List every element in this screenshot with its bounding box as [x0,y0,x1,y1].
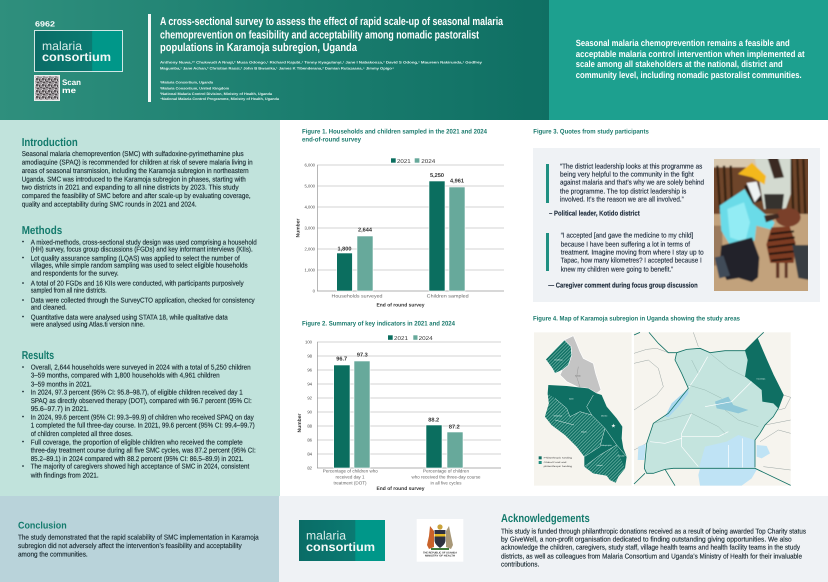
methods list: and cleaned. [31,304,67,312]
affiliations: ⁴National Malaria Control Programme, Ministry of Health, Uganda [160,97,279,101]
results heading: Results [22,350,54,362]
bar chart: figure 1: Households surveyed [332,294,383,299]
bar chart: figure 2: 97.3 [357,352,368,358]
quote 2: because I have been suffering a lot in terms of [561,241,690,249]
bar chart: figure 2: 94 [307,382,313,386]
quote 2: “I accepted [and gave the medicine to my child] [561,232,693,240]
title divider [148,14,151,102]
quote 1: against malaria and that’s why we are solely behind [560,179,704,187]
bar chart: figure 2 [297,335,501,492]
bar chart: figure 1: 5,000 [305,184,316,188]
map: Karamoja districts: Nabilatuk [554,415,562,417]
affiliations [160,80,279,101]
results list: three-day treatment course during all five SMC cycles, was 87.2 percent (95% CI: [31,447,256,455]
results list: 3–59 months in 2021. [31,380,92,388]
logo: malaria consortium: malaria [42,39,82,53]
quote 2 [546,232,704,290]
methods list: A total of 20 FGDs and 16 KIIs were conducted, with participants purposively [31,280,244,288]
icon: star marking study location: ★ [611,423,616,429]
introduction text: Seasonal malaria chemoprevention (SMC) with sulfadoxine-pyrimethamine plus [22,150,244,158]
bar chart: figure 2: 96.7 [336,356,347,362]
scan me label: Scan [62,78,81,87]
methods list: A mixed-methods, cross-sectional study design was used comprising a household [31,238,257,246]
methods list: and respondents for the survey. [31,270,119,278]
poster number: 6962 [35,20,55,28]
title: populations in Karamoja subregion, Uganda [160,42,358,54]
bar chart: figure 1 [296,158,504,309]
bar chart: figure 2: 92 [307,396,313,400]
conclusion text: The study demonstrated that the rapid scalability of SMC implementation in Karamoja [18,534,259,542]
bar chart: figure 1: Children sampled [427,294,469,299]
bar chart: figure 2: 82 [307,466,313,470]
map: Karamoja districts: Kaabong [554,359,562,361]
logo: Uganda Ministry of Health crest: THE REPUBLIC OF UGANDA [423,552,457,554]
introduction text [22,150,253,208]
bar chart: figure 1: 2,644 [358,228,373,234]
map: Karamoja districts: Kotido [575,375,581,377]
photo: health worker giving medicine to a child [714,159,808,291]
scan me label: me [62,86,77,95]
map: Uganda with Karamoja highlighted: Karamoja [757,378,765,380]
map: Uganda with Karamoja highlighted [634,332,791,486]
title [160,16,504,54]
bar chart: figure 2: treatment (DOT) [334,480,367,486]
logo: Uganda Ministry of Health crest: MINISTRY OF HEALTH [425,554,455,558]
bar chart: figure 2: who received the three-day course [412,474,481,480]
results list: SPAQ as directly observed therapy (DOT), compared with 96.7 percent (95% CI: [31,397,252,405]
quote 1: – Political leader, Kotido district [549,210,640,218]
quote 1 [546,163,704,218]
map: Karamoja districts: Amudat [618,455,625,457]
logo: malaria consortium [299,520,385,561]
bar chart: figure 1: 1,800 [338,247,352,253]
panel: participant quotes [533,148,820,302]
legend: 2024 [421,159,435,165]
results list: Overall, 2,644 households were surveyed in 2024 with a total of 5,250 children [31,364,251,372]
legend [388,335,433,342]
methods heading: Methods [22,225,62,237]
quote 1: involved. It’s the reason we are all involved.” [560,196,684,204]
bar chart: figure 1: 6,000 [305,162,316,168]
bar chart: figure 2: 88.2 [428,418,439,424]
map: Karamoja districts: Moroto [601,415,607,417]
conclusion text [18,534,259,559]
methods list [22,238,257,329]
bar chart: figure 2: End of round survey [376,486,425,492]
figure 2 title: Figure 2. Summary of key indicators in 2021 and 2024 [302,321,455,328]
legend: 2021 [397,159,411,165]
acknowledgements text: by GiveWell, a non-profit organisation dedicated to finding outstanding giving opportunities. We also [501,536,792,544]
quote 2: Tapac, how many kilometres? I accepted because I [561,257,702,265]
bar chart: figure 1: 5,250 [430,173,444,179]
legend: 2024 [419,336,433,342]
introduction text: amodiaquine (SPAQ) is recommended for children at risk of severe malaria living in [22,158,253,166]
panel: key message: Seasonal malaria chemoprevention remains a feasible and [576,38,790,48]
figure 1 title: end-of-round survey [302,137,361,144]
map: Karamoja districts: Kween [597,464,603,467]
quote 2: — Caregiver comment during focus group discussion [548,282,698,290]
title: A cross-sectional survey to assess the effect of rapid scale-up of seasonal malaria [160,16,504,28]
map legend [539,456,572,468]
map: Karamoja districts [534,332,632,486]
legend [391,158,435,165]
acknowledgements text: acknowledge the children, caregivers, study staff, village health teams and health facility teams in the study [501,544,800,552]
legend: 2021 [394,336,408,342]
figure 3 title: Figure 3. Quotes from study participants [533,129,649,136]
results list: The majority of caregivers showed high acceptance of SMC in 2024, consistent [31,463,249,471]
figure 1 title [302,128,487,144]
methods list: villages, while simple random sampling was used to select eligible households [31,262,248,270]
results list: In 2024, 99.6 percent (95% CI: 99.3–99.9) of children who received SPAQ on day [31,413,254,421]
methods list: sampled from all nine districts. [31,287,107,295]
results list: with findings from 2021. [30,471,99,479]
introduction text: Uganda. SMC was introduced to the Karamoja subregion in phases, starting with [22,176,246,184]
quote 1: “The district leadership looks at this programme as [560,163,703,171]
bar chart: figure 1: 0 [313,288,316,294]
authors: Magumba,¹ Jane Achan,² Christian Rassi,² John B Bwanika,¹ James K Tibenderana,² Damian Rutazaana,⁴ Jimmy Opigo⁴ [160,66,394,70]
results list [22,364,256,479]
introduction text: two districts in 2021 and expanding to all nine districts by 2023. This study [22,184,239,192]
bar chart: figure 1: 1,000 [305,268,316,272]
bar chart: figure 1: End of round survey [376,303,425,309]
affiliations: ¹Malaria Consortium, Uganda [160,80,213,84]
panel: logos and acknowledgements [279,496,828,582]
introduction text: quality and acceptability during SMC rounds in 2021 and 2024. [22,200,197,208]
bar chart: figure 1: 4,961 [450,179,464,185]
methods list: Quantitative data were analysed using STATA 18, while qualitative data [31,313,228,321]
map: Karamoja districts: Abim [569,398,574,400]
conclusion heading: Conclusion [18,521,67,532]
results list: 1 completed the full three-day course. In 2021, 99.6 percent (95% CI: 99.4–99.7) [31,422,255,430]
figure 4 title: Figure 4. Map of Karamoja subregion in Uganda showing the study areas [533,316,740,323]
logo: malaria consortium [34,30,122,72]
conclusion text: subregion did not adversely affect the intervention’s feasibility and acceptability [18,542,242,550]
QR code [34,75,60,101]
logo: malaria consortium: consortium [42,50,111,64]
panel: key message [549,0,828,120]
bar chart: figure 1: 2,000 [305,246,316,252]
bar chart: figure 2: 90 [307,410,313,414]
introduction heading: Introduction [22,137,78,149]
bar chart: figure 2: Number [297,413,303,432]
results list: 3–59 months, compared with 1,800 households with 4,961 children [31,372,220,380]
bar chart: figure 2: 96 [307,368,313,372]
logo: Uganda Ministry of Health crest [417,519,463,562]
methods list: Data were collected through the SurveyCTO application, checked for consistency [31,297,255,305]
methods list: Lot quality assurance sampling (LQAS) was applied to select the number of [31,254,240,262]
figure 1 title: Figure 1. Households and children sampled in the 2021 and 2024 [302,128,487,135]
bar chart: figure 1: 4,000 [305,204,316,210]
logo: malaria consortium: malaria [306,528,346,542]
map: Karamoja subregion and Uganda [534,332,791,486]
introduction text: areas of seasonal transmission, including the Karamoja subregion in northeastern [22,167,249,175]
quote 2: knew my children were going to benefit.” [561,266,674,274]
bar chart: figure 2: Percentage of children [423,468,469,474]
bar chart: figure 2: 98 [307,354,313,358]
results list: 95.6–97.7) in 2021. [31,405,89,413]
quote 1: being very helpful to the community in the fight [560,171,694,179]
results list: 85.2–89.1) in 2024 compared with 88.2 percent (95% CI: 86.5–89.9) in 2021. [31,455,244,463]
bar chart: figure 2: 88 [307,424,313,428]
acknowledgements text [501,528,806,569]
introduction text: compared the feasibility of SMC before and after scale-up by evaluating coverage, [22,192,251,200]
scan me label [62,78,81,95]
authors: Anthony Nuwa,¹* Chukwudi A Nnaji,² Musa Odongo,¹ Richard Kajubi,¹ Tonny Kyagulanyi,¹ Jane I Nabakooza,³ David S Odong,¹ Maureen Nakirunda,¹ Godfrey [160,60,482,64]
results list: of children completed all three doses. [31,430,133,438]
methods list: were analysed using Atlas.ti version nine. [30,321,145,329]
acknowledgements text: contributions. [501,561,539,569]
panel: conclusion [0,496,279,582]
bar chart: figure 2: 87.2 [449,424,460,430]
methods list: (HH) survey, focus group discussions (FGDs) and key informant interviews (KIIs). [31,246,253,254]
results list: Full coverage, the proportion of eligible children who received the complete [31,438,243,446]
logo: malaria consortium: consortium [306,540,375,554]
panel: key message: scale among all stakeholders at the national, district and [576,59,783,69]
acknowledgements heading: Acknowledgements [501,513,590,525]
authors [160,60,482,70]
map legend: Global Fund and [544,461,567,464]
bar chart: figure 1: Number [296,218,302,238]
bar chart: figure 1: 3,000 [305,226,316,230]
affiliations: ²Malaria Consortium, United Kingdom [160,86,229,90]
panel: introduction, methods and results [0,120,280,496]
map: Karamoja districts: Napak [581,431,587,433]
bar chart: figure 2: in all five cycles [430,480,462,486]
conclusion text: among the communities. [18,551,88,559]
title: chemoprevention on feasibility and acceptability among nomadic pastoralist [160,30,479,42]
quote 1: the programme. The top district leadership is [560,187,687,195]
bar chart: figure 2: 86 [307,438,313,442]
map: Karamoja districts: Nakapiripirit [601,444,612,447]
affiliations: ³National Malaria Control Division, Ministry of Health, Uganda [160,92,272,96]
header band [0,0,549,120]
bar chart: figure 2: 100 [305,340,313,344]
bar chart: figure 2: 84 [307,452,313,456]
map legend: philanthropic funding [544,465,572,468]
results list: In 2024, 97.3 percent (95% CI: 95.8–98.7), of eligible children received day 1 [31,388,243,396]
map legend: Philanthropic funding [544,457,572,459]
acknowledgements text: districts, as well as colleagues from Malaria Consortium and Uganda’s Ministry of Health for their invaluable [501,552,802,560]
quote 2: treatment. Imagine moving from where I stay up to [561,249,704,257]
bar chart: figure 2: Percentage of children who [323,468,378,474]
bar chart: figure 2: received day 1 [336,474,365,479]
